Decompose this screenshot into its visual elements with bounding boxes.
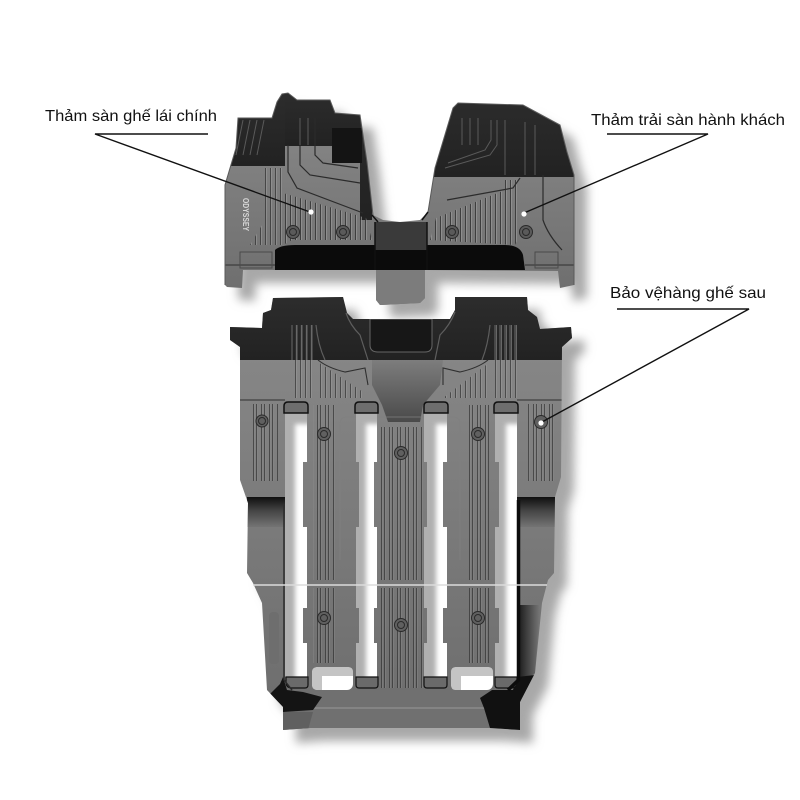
panel: front floor mats <box>220 90 580 310</box>
rear mat right inner edge <box>508 500 518 690</box>
callout: rear row <box>538 285 766 426</box>
rear mat anchor rings <box>256 415 548 632</box>
drop shadows <box>238 106 587 743</box>
rear mat base <box>225 295 575 735</box>
front mat base <box>225 146 574 305</box>
rear mat right side panel <box>517 497 557 527</box>
rear mat gray corner left <box>283 712 313 730</box>
front mat center tab <box>376 270 426 306</box>
rear mat dark upper zone <box>225 295 575 360</box>
rear mat left inner edge <box>284 505 292 690</box>
rear mat black corner right <box>480 675 535 730</box>
callout dot: rear row <box>538 420 544 426</box>
slot 1 <box>285 413 307 677</box>
front mat anchor rings <box>286 226 532 238</box>
loop shadows <box>312 667 493 690</box>
front mat center tunnel <box>375 222 427 250</box>
callout dot: passenger mat <box>521 211 527 217</box>
rear mat center console <box>370 319 432 352</box>
rear mat center hump <box>372 360 443 422</box>
front mat side pads <box>240 252 272 268</box>
front mat recess sides <box>372 212 428 270</box>
front mat dark sculpt <box>332 128 362 163</box>
callout label: passenger mat: Thảm trải sàn hành khách <box>591 112 785 129</box>
callout leader: driver mat <box>95 134 310 212</box>
loop cutout right <box>451 667 493 690</box>
slot bottom tabs <box>286 677 517 688</box>
callout: passenger mat <box>521 112 785 217</box>
rear mat ribs lower <box>250 404 557 688</box>
slot 4 <box>495 413 517 677</box>
callout dot: driver mat <box>308 209 314 215</box>
slot top caps <box>284 402 518 413</box>
rear mat left lower pad <box>269 612 279 664</box>
front mat grooves <box>226 142 574 266</box>
slots in rear mat <box>285 413 517 690</box>
slot 2 <box>356 413 377 677</box>
slot inner shadows <box>280 405 522 685</box>
callout leader: passenger mat <box>524 134 708 213</box>
callout leader: rear row <box>542 309 749 422</box>
rear mat black corner left <box>270 677 322 712</box>
callout: driver mat <box>45 108 314 215</box>
front mat ribs <box>283 193 372 245</box>
rear mat right lower shading <box>520 605 538 677</box>
brand label: ODYSSEY: ODYSSEY <box>241 198 250 232</box>
rear mat dark-zone highlights <box>292 312 515 360</box>
rear mat center panel outline <box>386 416 421 418</box>
rear mat contour grooves <box>240 360 562 400</box>
rear mat bottom bar <box>300 728 500 729</box>
slot 3 <box>424 413 447 677</box>
front mat rear recess <box>275 245 525 270</box>
callout label: driver mat: Thảm sàn ghế lái chính <box>45 108 217 125</box>
callout label: rear row: Bảo vệhàng ghế sau <box>610 285 766 302</box>
front mat dark upper zones <box>220 90 580 220</box>
seam line <box>253 584 547 586</box>
loop cutout left <box>312 667 353 690</box>
rear mat ribs upper <box>295 325 312 398</box>
rear mat left side panel <box>247 497 285 527</box>
front mat edge highlight <box>225 93 574 285</box>
infographic: floor mat diagram <box>45 92 784 748</box>
panel: rear floor mat <box>225 295 575 735</box>
